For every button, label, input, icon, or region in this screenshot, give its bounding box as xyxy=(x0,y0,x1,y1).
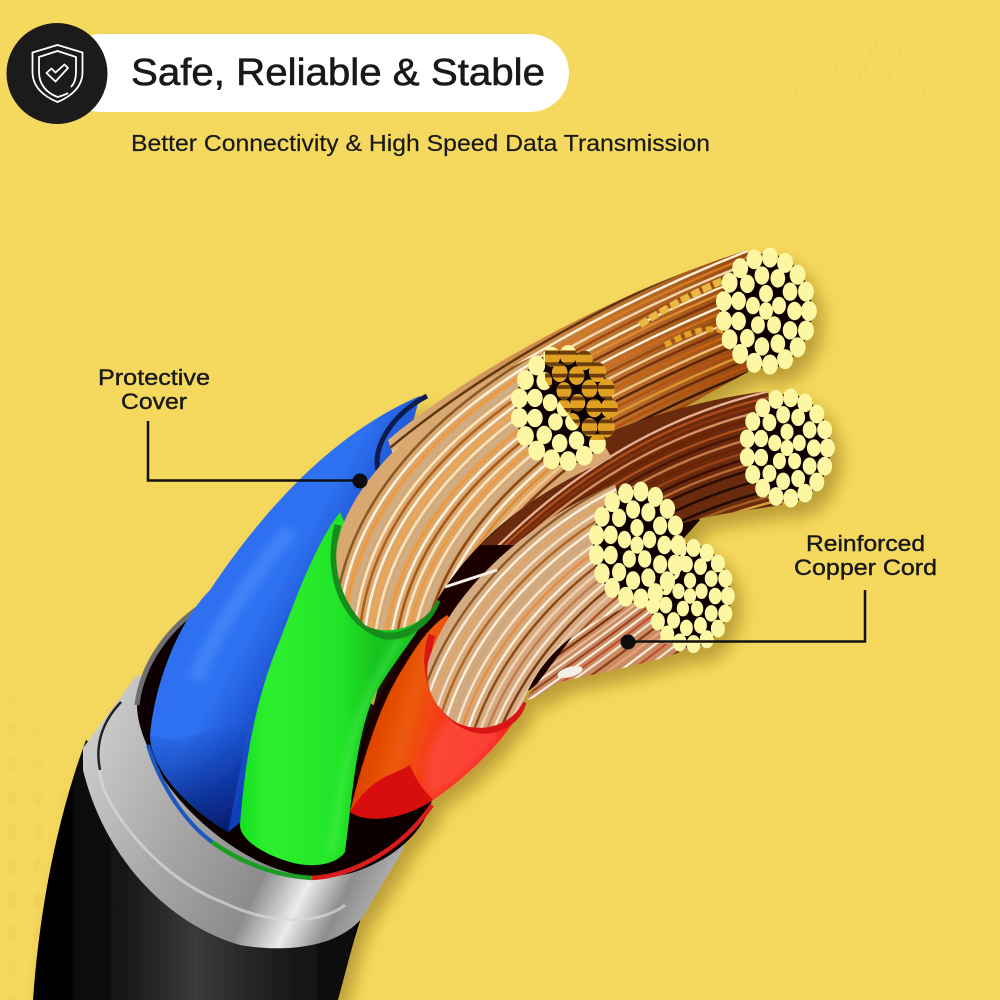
title pill xyxy=(62,34,569,112)
silver collar xyxy=(83,675,430,948)
conductor end: top xyxy=(716,248,817,374)
leader line xyxy=(148,421,368,488)
label: Cover xyxy=(121,389,187,414)
cable illustration xyxy=(33,236,835,1000)
header badge xyxy=(6,23,569,124)
wire strands: upper bundle xyxy=(385,236,791,578)
leader line with dot xyxy=(620,590,865,650)
icon: shield in black circle xyxy=(6,23,108,124)
label text: Copper Cord xyxy=(794,555,937,580)
label: Protective xyxy=(98,365,210,390)
conductor end: lower front xyxy=(589,482,686,608)
label text xyxy=(794,531,937,580)
conductor end: center xyxy=(511,345,618,471)
wire strands: rear bundle xyxy=(480,382,804,545)
dark gap between wires xyxy=(350,440,700,800)
title text: Safe, Reliable & Stable xyxy=(131,52,545,94)
wire strands: front bundle xyxy=(335,343,659,677)
label xyxy=(98,365,210,414)
callout: reinforced copper cord xyxy=(620,531,937,650)
red wire xyxy=(350,615,523,819)
blue wire xyxy=(150,396,427,832)
conductor end: middle right xyxy=(740,388,835,508)
conductor end: lower rear xyxy=(646,539,735,653)
outer black sheath xyxy=(33,740,362,1000)
cable opening xyxy=(137,607,432,878)
wire strands: lower pair, front xyxy=(427,484,634,728)
green wire xyxy=(240,512,437,865)
wire strands: lower pair, back xyxy=(525,604,712,728)
callout: protective cover xyxy=(98,365,368,488)
label text: Reinforced xyxy=(806,531,925,556)
subtitle: Better Connectivity & High Speed Data Transmission xyxy=(131,130,710,156)
